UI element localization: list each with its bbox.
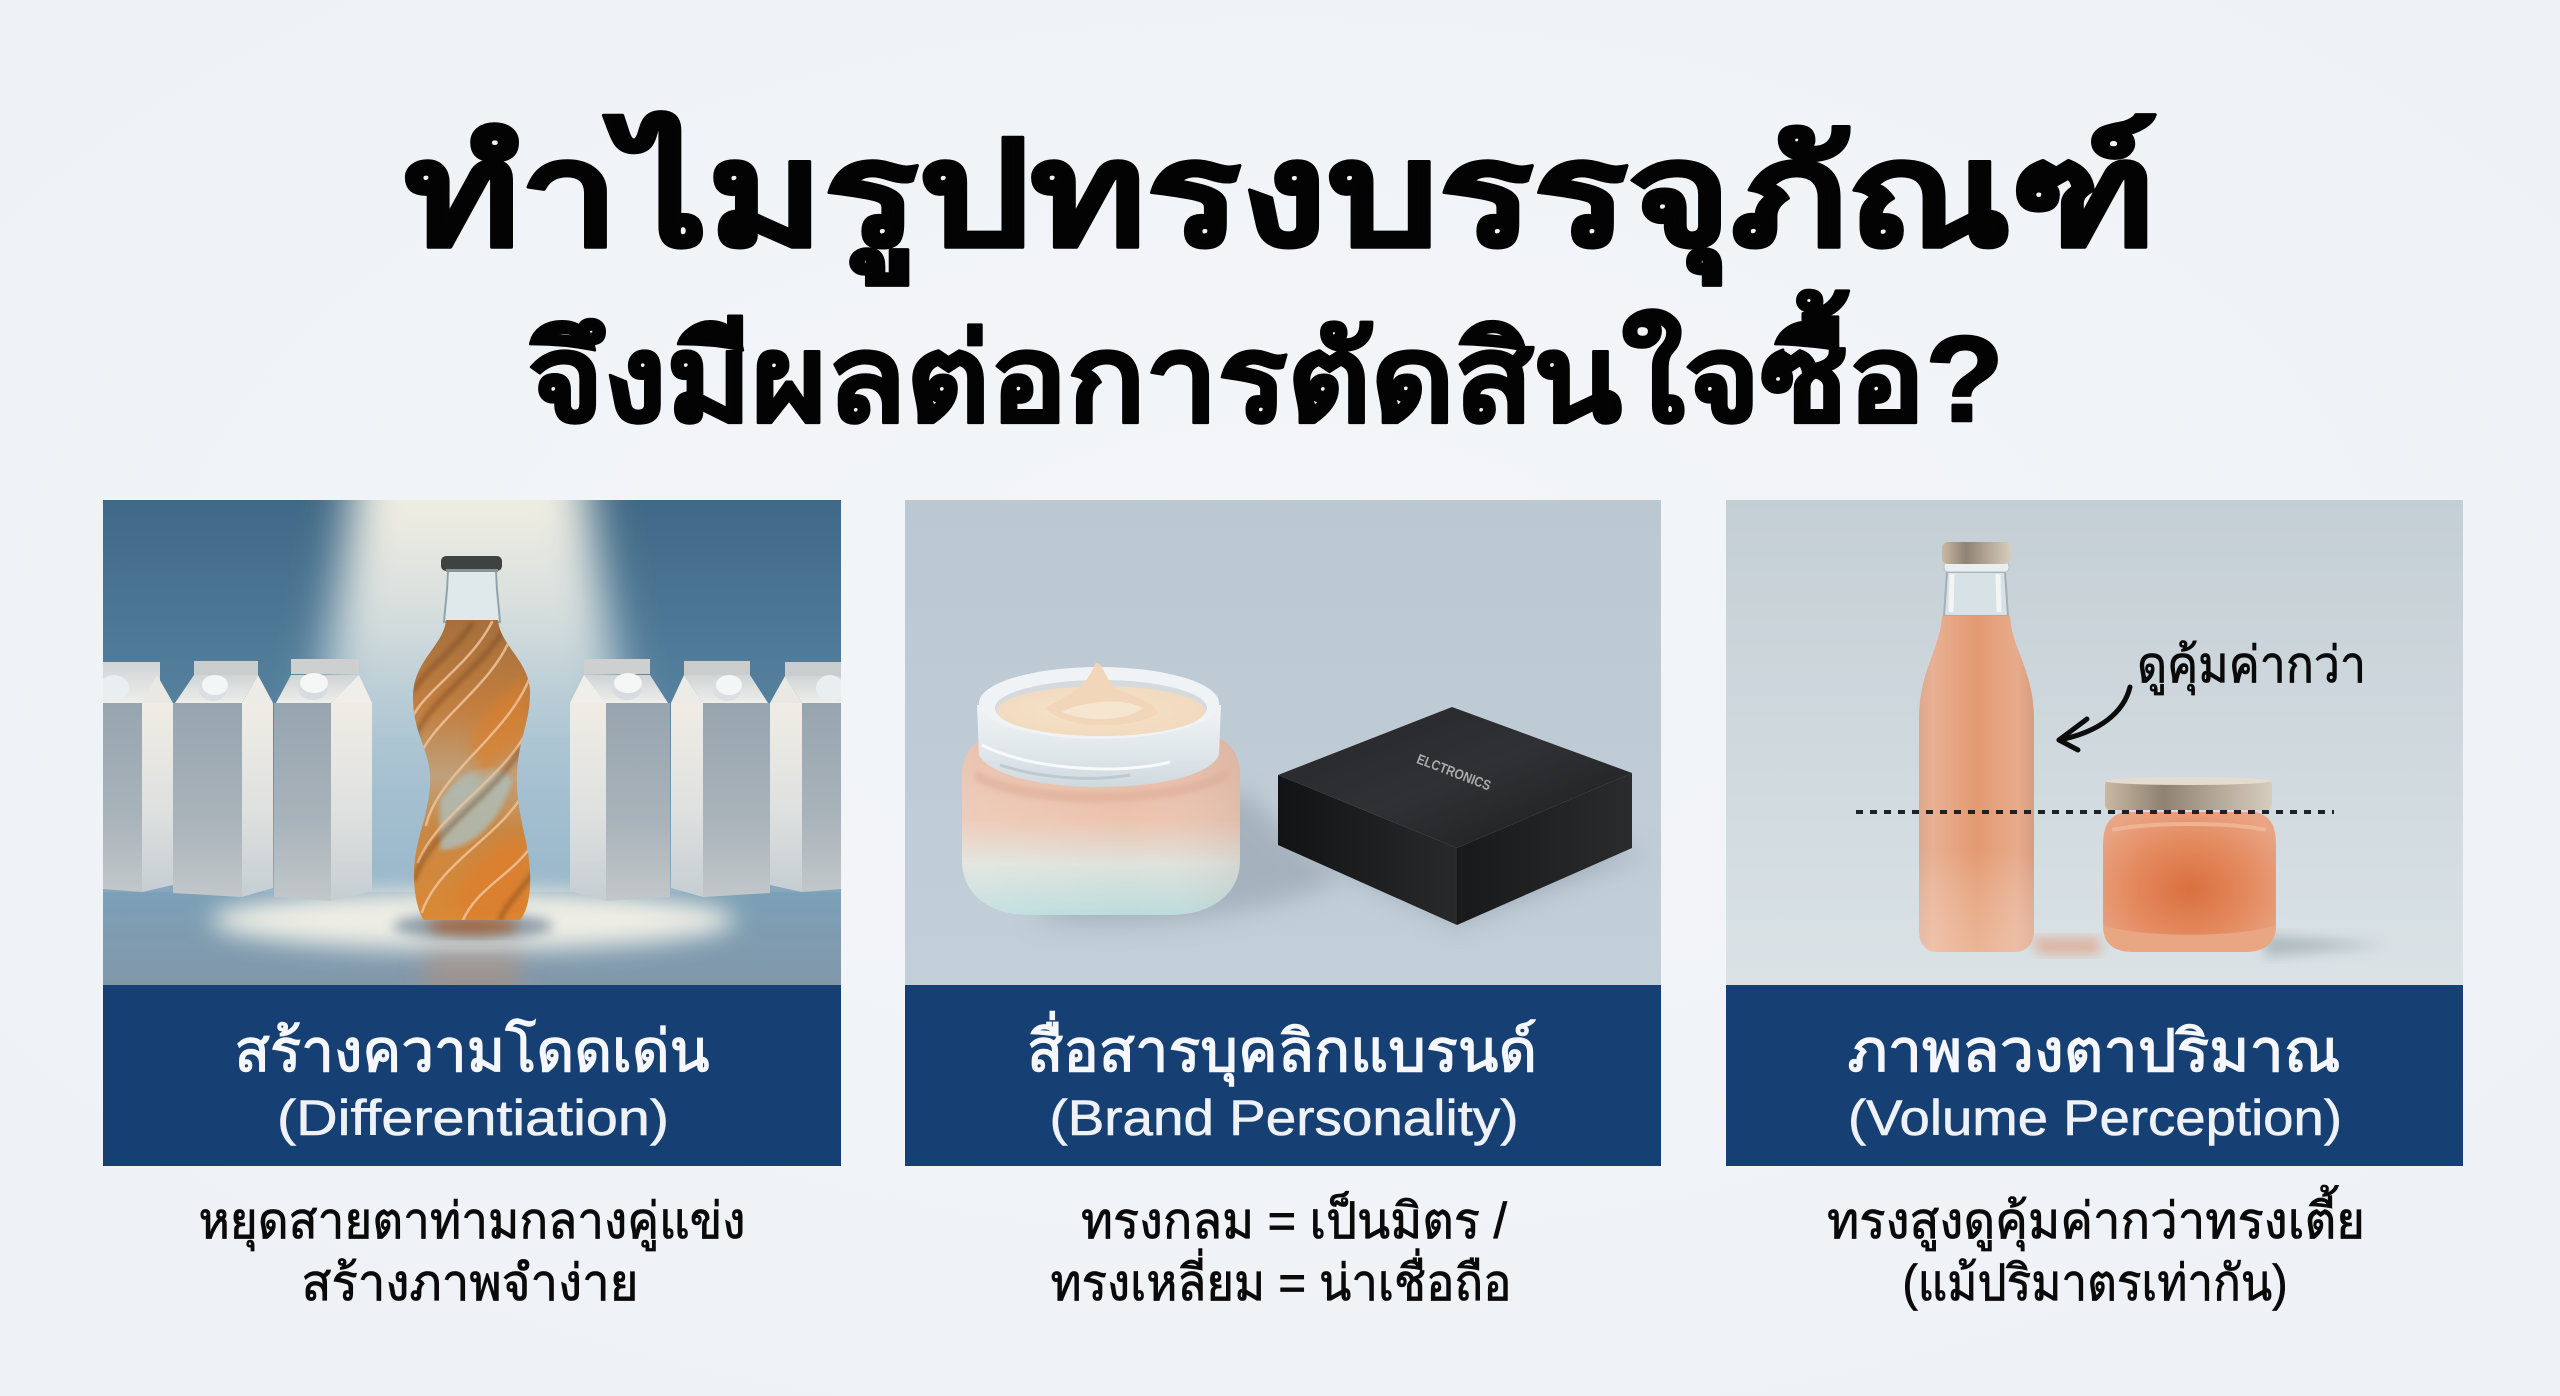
description: สร้างภาพจำง่าย: [302, 1255, 638, 1311]
description: หยุดสายตาท่ามกลางคู่แข่ง: [198, 1193, 746, 1251]
box label: ELCTRONICS: [1415, 751, 1493, 793]
description: [198, 1193, 746, 1311]
square black box: [1278, 707, 1650, 925]
swirl bottle: [393, 556, 553, 939]
floor shadows: [2030, 938, 2100, 954]
description: (แม้ปริมาตรเท่ากัน): [1902, 1255, 2288, 1311]
cartons left: [99, 659, 372, 901]
short jar: [2103, 777, 2276, 952]
description: [1050, 1191, 1512, 1311]
title: [404, 111, 2157, 447]
illustration: spotlit swirl bottle among cartons: [103, 500, 841, 985]
illustration: round jar and square box: [905, 500, 1661, 985]
illustration: tall bottle vs short jar: [1726, 500, 2463, 985]
description: ทรงสูงดูคุ้มค่ากว่าทรงเตี้ย: [1827, 1185, 2365, 1251]
title: ทำไมรูปทรงบรรจุภัณฑ์: [404, 111, 2157, 286]
caption bar: สร้างความโดดเด่น: [234, 1018, 710, 1084]
panel: differentiation: [99, 440, 844, 1311]
round cream jar: [962, 663, 1340, 924]
panel: volume perception: [1726, 500, 2463, 1311]
description: ทรงกลม = เป็นมิตร /: [1081, 1191, 1507, 1249]
description: [1827, 1185, 2365, 1311]
caption bar: (Volume Perception): [1848, 1090, 2342, 1146]
caption bar: (Brand Personality): [1050, 1090, 1518, 1146]
panel: brand personality: [905, 500, 1661, 1311]
caption bar: สื่อสารบุคลิกแบรนด์: [1027, 1011, 1537, 1087]
curved arrow: [2059, 687, 2130, 750]
caption bar: [1726, 985, 2463, 1166]
caption bar: ภาพลวงตาปริมาณ: [1848, 1019, 2340, 1084]
description: ทรงเหลี่ยม = น่าเชื่อถือ: [1050, 1249, 1512, 1311]
caption bar: [905, 985, 1661, 1166]
callout: ดูคุ้มค่ากว่า: [2137, 637, 2366, 695]
title: จึงมีผลต่อการตัดสินใจซื้อ?: [528, 290, 2004, 447]
caption bar: [103, 985, 841, 1166]
dotted comparison line: [1856, 810, 2334, 814]
tall bottle: [1919, 542, 2034, 952]
cartons right: [570, 659, 844, 901]
caption bar: (Differentiation): [277, 1090, 669, 1146]
